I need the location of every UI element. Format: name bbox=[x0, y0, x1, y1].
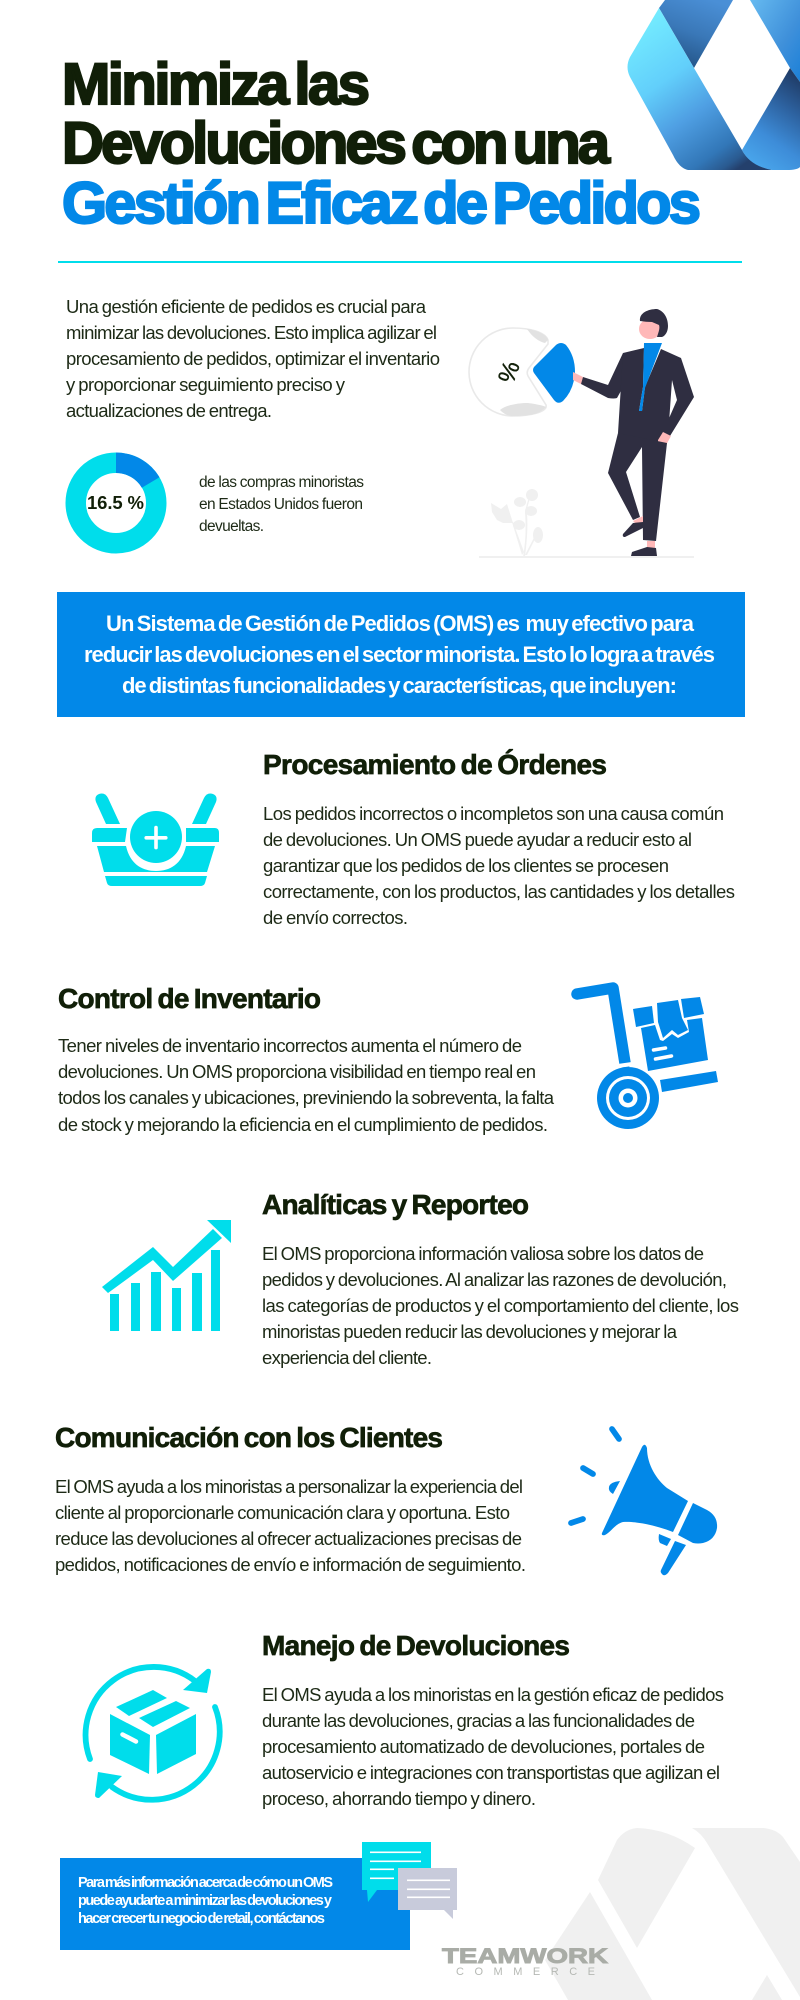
section: Control de Inventario: Control de Inventario bbox=[58, 983, 321, 1014]
callout: contact: puede ayudarte a minimizar las devoluciones y bbox=[78, 1893, 332, 1909]
section: Manejo de Devoluciones: autoservicio e integraciones con transportistas que agilizan el bbox=[262, 1762, 720, 1783]
illustration: person holding percent pie bbox=[469, 309, 694, 558]
intro paragraph: Una gestión eficiente de pedidos es crucial para bbox=[66, 296, 427, 317]
section: Manejo de Devoluciones: proceso, ahorrando tiempo y dinero. bbox=[262, 1788, 536, 1809]
brand logo: Teamwork Commerce: TEAMWORK bbox=[442, 1945, 608, 1968]
section: Procesamiento de Órdenes: de envío correctos. bbox=[263, 907, 408, 928]
intro paragraph: procesamiento de pedidos, optimizar el inventario bbox=[66, 348, 440, 369]
section: Manejo de Devoluciones: durante las devoluciones, gracias a las funcionalidades de bbox=[262, 1710, 695, 1731]
illustration: person holding percent pie: % bbox=[493, 358, 526, 387]
brand logo: Teamwork Commerce: COMMERCE bbox=[456, 1966, 595, 1978]
section: Control de Inventario: Tener niveles de inventario incorrectos aumenta el número de bbox=[58, 1035, 522, 1056]
title: Devoluciones con una bbox=[62, 111, 611, 176]
icon: hand truck with box bbox=[577, 988, 718, 1129]
stat caption: en Estados Unidos fueron bbox=[199, 496, 363, 513]
section: Procesamiento de Órdenes bbox=[263, 749, 735, 928]
section: Procesamiento de Órdenes: garantizar que los pedidos de los clientes se procesen bbox=[263, 855, 669, 876]
section: Procesamiento de Órdenes: de devoluciones. Un OMS puede ayudar a reducir esto al bbox=[263, 829, 692, 850]
banner: OMS intro: reducir las devoluciones en el sector minorista. Esto lo logra a través bbox=[84, 642, 715, 667]
callout: contact: Para más información acerca de cómo un OMS bbox=[78, 1875, 333, 1891]
banner: OMS intro bbox=[57, 592, 745, 717]
icon: shopping basket bbox=[92, 794, 219, 886]
icon: box with return arrows bbox=[86, 1667, 220, 1800]
banner: OMS intro: de distintas funcionalidades y características, que incluyen: bbox=[122, 673, 677, 698]
logo ribbon top right bbox=[628, 0, 800, 170]
icon: chat bubbles bbox=[362, 1842, 457, 1919]
section: Analíticas y Reporteo: El OMS proporciona información valiosa sobre los datos de bbox=[262, 1243, 704, 1264]
donut chart: 16.5 %: 16.5 % bbox=[87, 492, 144, 513]
section: Comunicación con los Clientes: cliente al proporcionarle comunicación clara y oportuna. Esto bbox=[55, 1502, 510, 1523]
watermark: logo shape bottom right bbox=[545, 1828, 800, 2000]
section: Comunicación con los Clientes bbox=[55, 1422, 526, 1575]
section: Procesamiento de Órdenes: Los pedidos incorrectos o incompletos son una causa común bbox=[263, 803, 724, 824]
stat caption: devueltas. bbox=[199, 518, 264, 535]
icon: megaphone bbox=[571, 1429, 717, 1575]
section: Procesamiento de Órdenes: Procesamiento de Órdenes bbox=[263, 749, 607, 780]
section: Comunicación con los Clientes: pedidos, notificaciones de envío e información de seguimiento. bbox=[55, 1554, 526, 1575]
section: Analíticas y Reporteo: minoristas pueden reducir las devoluciones y mejorar la bbox=[262, 1321, 678, 1342]
intro paragraph: y proporcionar seguimiento preciso y bbox=[66, 374, 346, 395]
donut chart: 16.5 % bbox=[76, 452, 160, 543]
section: Manejo de Devoluciones: Manejo de Devoluciones bbox=[262, 1630, 570, 1661]
stat caption bbox=[199, 474, 364, 535]
brand logo: Teamwork Commerce bbox=[442, 1945, 608, 1978]
banner: OMS intro: Un Sistema de Gestión de Pedidos (OMS) es muy efectivo para bbox=[106, 611, 695, 636]
title: Minimiza las bbox=[62, 52, 370, 117]
section: Analíticas y Reporteo bbox=[262, 1189, 739, 1368]
icon: rising bar chart bbox=[102, 1220, 231, 1331]
section: Procesamiento de Órdenes: correctamente, con los productos, las cantidades y los detalles bbox=[263, 881, 735, 902]
section: Comunicación con los Clientes: El OMS ayuda a los minoristas a personalizar la experiencia del bbox=[55, 1476, 523, 1497]
section: Control de Inventario: devoluciones. Un OMS proporciona visibilidad en tiempo real en bbox=[58, 1061, 536, 1082]
section: Manejo de Devoluciones: procesamiento automatizado de devoluciones, portales de bbox=[262, 1736, 705, 1757]
intro paragraph: actualizaciones de entrega. bbox=[66, 400, 272, 421]
section: Comunicación con los Clientes: reduce las devoluciones al ofrecer actualizaciones precisas de bbox=[55, 1528, 522, 1549]
section: Manejo de Devoluciones bbox=[262, 1630, 724, 1809]
intro paragraph: minimizar las devoluciones. Esto implica agilizar el bbox=[66, 322, 437, 343]
section: Analíticas y Reporteo: Analíticas y Reporteo bbox=[262, 1189, 529, 1220]
section: Control de Inventario: todos los canales y ubicaciones, previniendo la sobreventa, la falta bbox=[58, 1087, 555, 1108]
callout: contact bbox=[60, 1858, 410, 1950]
title bbox=[62, 52, 701, 236]
callout: contact: hacer crecer tu negocio de retail, contáctanos bbox=[78, 1911, 325, 1927]
section: Control de Inventario: de stock y mejorando la eficiencia en el cumplimiento de pedidos. bbox=[58, 1114, 548, 1135]
intro paragraph bbox=[66, 296, 440, 421]
title: Gestión Eficaz de Pedidos bbox=[62, 171, 701, 236]
section: Manejo de Devoluciones: El OMS ayuda a los minoristas en la gestión eficaz de pedidos bbox=[262, 1684, 724, 1705]
section: Comunicación con los Clientes: Comunicación con los Clientes bbox=[55, 1422, 443, 1453]
section: Control de Inventario bbox=[58, 983, 555, 1135]
stat caption: de las compras minoristas bbox=[199, 474, 364, 491]
section: Analíticas y Reporteo: pedidos y devoluciones. Al analizar las razones de devolución, bbox=[262, 1269, 727, 1290]
section: Analíticas y Reporteo: las categorías de productos y el comportamiento del cliente, los bbox=[262, 1295, 739, 1316]
section: Analíticas y Reporteo: experiencia del cliente. bbox=[262, 1347, 432, 1368]
